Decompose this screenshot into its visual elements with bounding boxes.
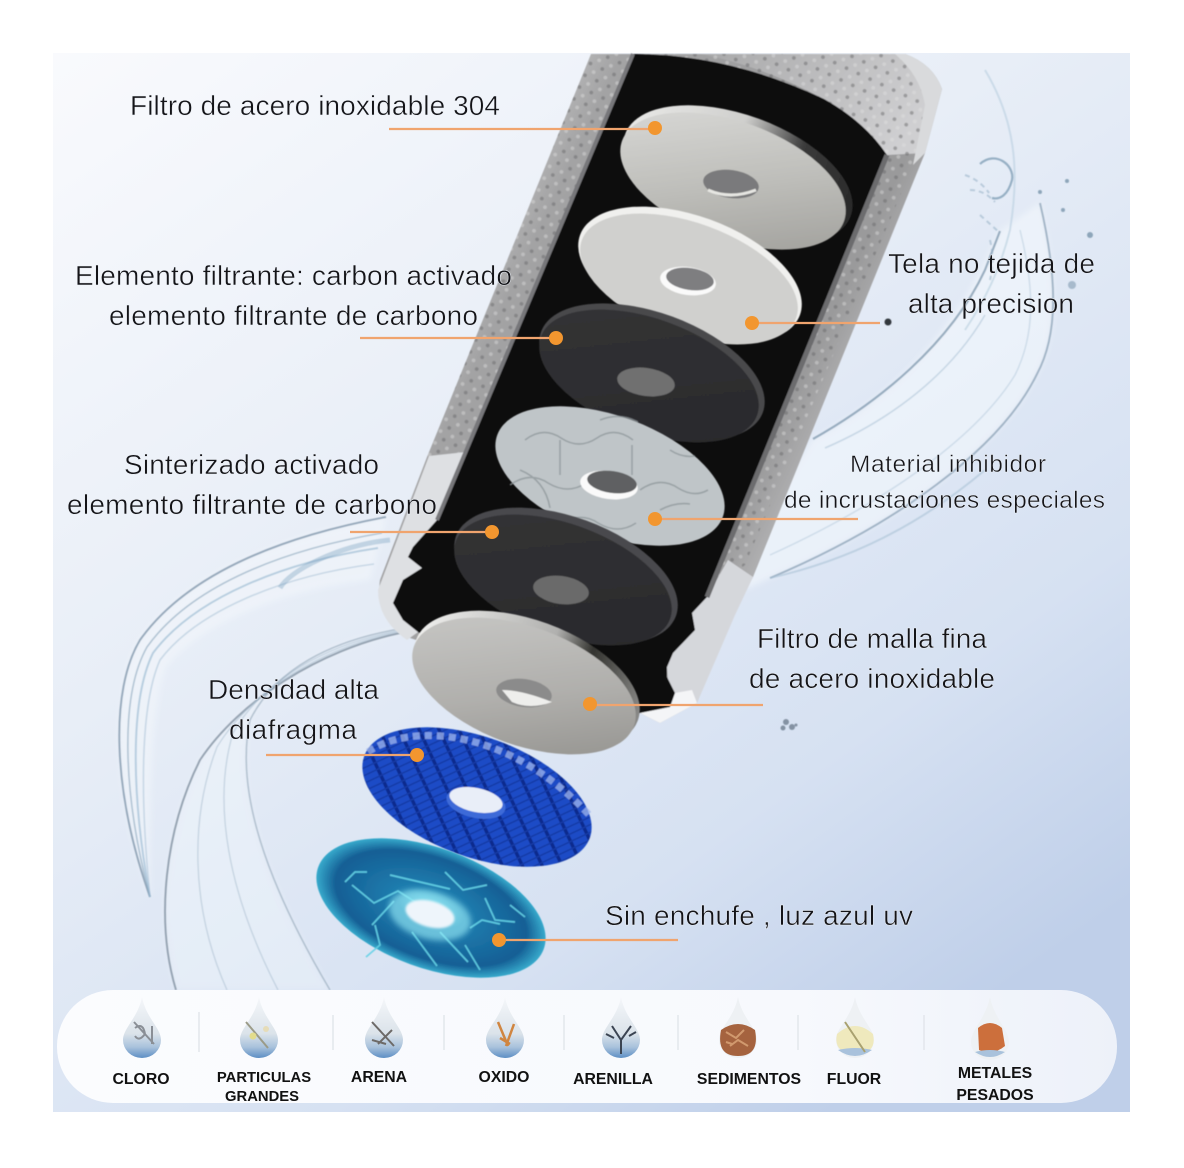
label: Sinterizado activado: Sinterizado activado — [124, 449, 379, 480]
label: Sin enchufe luz azul uv: Sin enchufe , luz azul uv — [605, 900, 913, 931]
label: Sinterizado activado — [67, 449, 499, 539]
disc 6: fine stainless steel mesh — [394, 583, 658, 781]
water speck — [884, 318, 892, 326]
water speck — [780, 719, 798, 730]
contaminant: metales pesados — [956, 997, 1034, 1104]
label: Elemento filtrante carbon activado: elemento filtrante de carbono — [109, 300, 478, 331]
contaminants panel — [57, 990, 1117, 1105]
contaminant: oxido: OXIDO — [479, 1069, 529, 1086]
disc 4: scale inhibiting material — [477, 379, 743, 573]
left threaded end — [378, 452, 466, 640]
contaminant: cloro: CLORO — [112, 1071, 170, 1088]
contaminant: arenilla — [573, 997, 653, 1088]
contaminant: particulas grandes: GRANDES — [225, 1089, 299, 1105]
label: Filtro de acero inoxidable 304: Filtro de acero inoxidable 304 — [130, 90, 500, 121]
label: Tela no tejida de alta precision: alta precision — [908, 288, 1074, 319]
label: Sin enchufe luz azul uv — [492, 900, 913, 947]
contaminant: fluor — [827, 997, 882, 1088]
label: Filtro de malla fina — [583, 623, 995, 711]
contaminant: sedimentos — [697, 997, 801, 1088]
disc 1: stainless steel filter — [602, 78, 871, 277]
contaminant: particulas grandes — [217, 997, 311, 1105]
disc 8: blue UV circuit disc — [298, 811, 564, 1005]
disc 7: high density blue diaphragm — [344, 700, 610, 894]
label: Filtro de malla fina: Filtro de malla fina — [757, 623, 987, 654]
disc 5: sintered carbon element — [436, 481, 696, 672]
label: Material inhibidor de incrustaciones especiales: de incrustaciones especiales — [784, 487, 1105, 514]
water splash right — [745, 70, 1093, 590]
contaminant: particulas grandes: PARTICULAS — [217, 1070, 311, 1086]
label: Elemento filtrante carbon activado — [75, 260, 563, 345]
top rim — [895, 54, 942, 165]
contaminant: metales pesados: METALES — [958, 1065, 1032, 1082]
inner wall shade — [707, 155, 887, 597]
contaminant: cloro — [112, 997, 170, 1088]
black interior — [393, 54, 887, 715]
tube outer wall — [379, 54, 942, 723]
contaminant: metales pesados: PESADOS — [956, 1087, 1034, 1104]
contaminant: arena — [351, 997, 407, 1086]
contaminant: fluor: FLUOR — [827, 1071, 882, 1088]
label: Densidad alta diafragma: Densidad alta — [208, 674, 379, 705]
disc 3: carbon filter element — [521, 276, 783, 469]
water splash left — [119, 517, 405, 990]
label: Tela no tejida de alta precision: Tela no tejida de — [888, 248, 1095, 279]
label: Filtro de acero inoxidable 304 — [130, 90, 662, 135]
label: Sinterizado activado: elemento filtrante de carbono — [67, 489, 437, 520]
contaminant: arena: ARENA — [351, 1069, 407, 1086]
label: Densidad alta diafragma — [208, 674, 424, 762]
label: Densidad alta diafragma: diafragma — [229, 714, 357, 745]
contaminant: oxido — [479, 997, 529, 1086]
label: Tela no tejida de alta precision — [745, 248, 1095, 330]
right threaded end — [640, 560, 753, 723]
top band lighter shade — [700, 54, 940, 155]
contaminant: sedimentos: SEDIMENTOS — [697, 1071, 801, 1088]
label: Filtro de malla fina: de acero inoxidable — [749, 663, 995, 694]
label: Material inhibidor de incrustaciones especiales — [648, 451, 1105, 526]
disc 2: non-woven fabric — [560, 180, 820, 371]
label: Material inhibidor de incrustaciones especiales: Material inhibidor — [850, 451, 1046, 478]
perforated texture — [427, 54, 925, 600]
contaminant: arenilla: ARENILLA — [573, 1071, 653, 1088]
filter cartridge tube — [378, 54, 942, 723]
label: Elemento filtrante carbon activado: Elemento filtrante: carbon activado — [75, 260, 512, 291]
